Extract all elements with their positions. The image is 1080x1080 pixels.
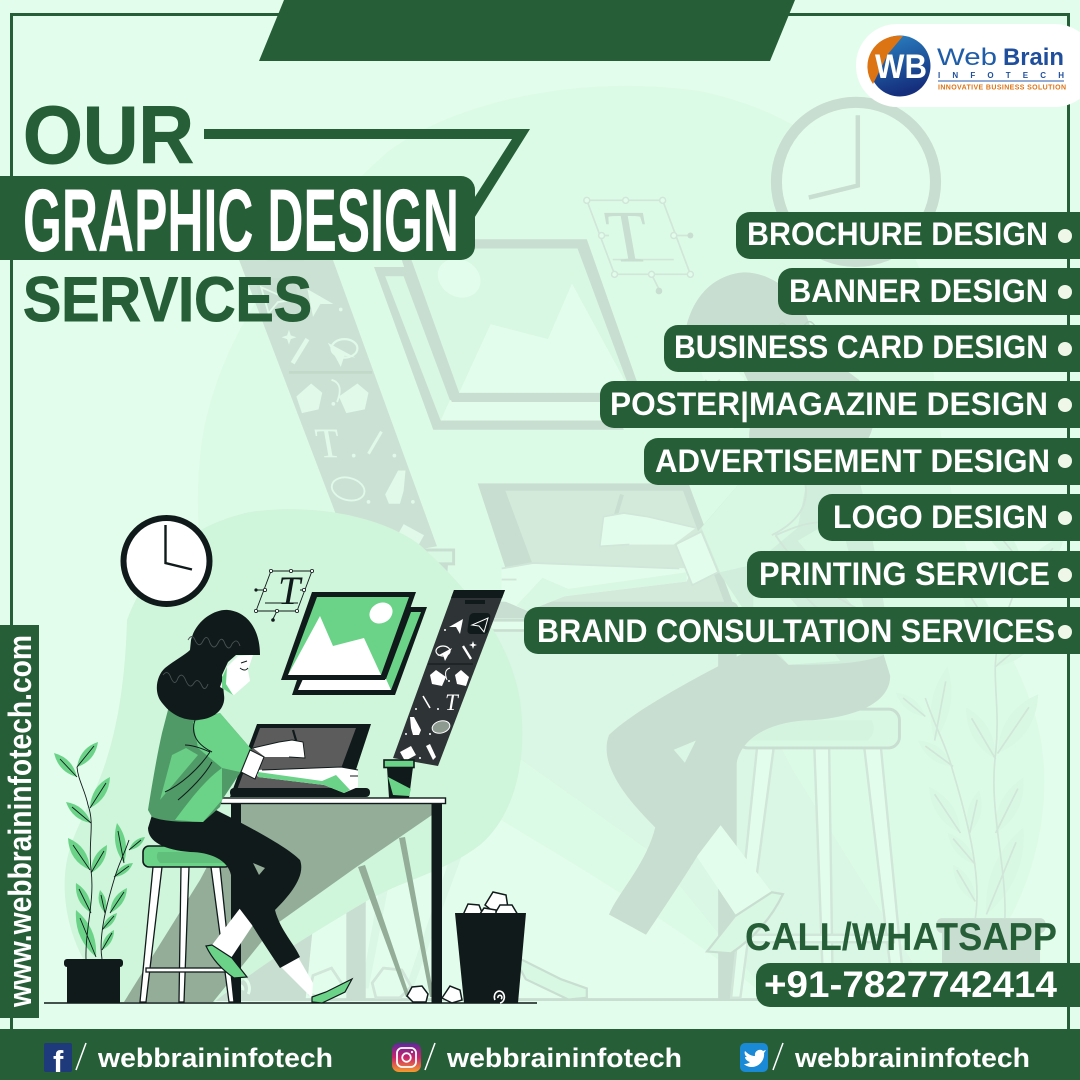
title: OUR: OUR bbox=[23, 90, 194, 181]
website side panel: www.webbraininfotech.com bbox=[2, 635, 38, 1008]
wall clock bbox=[124, 518, 210, 604]
coffee cup bbox=[384, 760, 414, 798]
text frame icon bbox=[254, 568, 314, 622]
shirt bbox=[148, 706, 252, 822]
service: printing service: PRINTING SERVICE bbox=[759, 556, 1050, 592]
hair bbox=[157, 610, 260, 720]
eraser and pencil icons bbox=[400, 744, 436, 761]
title bar: GRAPHIC DESIGN: GRAPHIC DESIGN bbox=[23, 170, 459, 270]
service: brand consultation services: BRAND CONSULTATION SERVICES bbox=[537, 613, 1055, 649]
desk shadow bbox=[124, 803, 434, 1002]
front foot bbox=[281, 957, 352, 1003]
phone number: +91-7827742414 bbox=[764, 964, 1057, 1005]
social: twitter: webbraininfotech bbox=[794, 1043, 1030, 1073]
service: business card design: BUSINESS CARD DESIGN bbox=[674, 329, 1048, 365]
line and type icons bbox=[423, 690, 460, 715]
service: logo design: LOGO DESIGN bbox=[833, 499, 1048, 535]
top banner shape bbox=[259, 0, 795, 61]
services list bbox=[524, 212, 1080, 654]
logo: INFOTECH bbox=[938, 71, 1064, 80]
ghost illustration: mirrored enlarged designer watermark bbox=[171, 86, 1080, 1000]
background blob bbox=[65, 509, 522, 1003]
service: banner design: BANNER DESIGN bbox=[789, 273, 1048, 309]
face bbox=[220, 655, 253, 695]
social: instagram: webbraininfotech bbox=[446, 1043, 682, 1073]
logo: WB bbox=[875, 48, 927, 86]
drawing tablet bbox=[230, 724, 371, 797]
title: SERVICES: SERVICES bbox=[23, 265, 312, 335]
service: logo design bbox=[818, 494, 1080, 541]
floor line bbox=[44, 1002, 537, 1004]
arrow tool icons bbox=[449, 618, 488, 634]
waste bin with paper bbox=[407, 892, 526, 1003]
logo: Brain bbox=[1003, 44, 1064, 71]
logo bbox=[856, 24, 1080, 107]
picture frames bbox=[281, 592, 427, 695]
designer figure bbox=[148, 610, 358, 1003]
title connector line bbox=[204, 129, 530, 220]
desk bbox=[220, 798, 446, 1003]
drawing arm with stylus bbox=[253, 730, 305, 758]
service: advertisement design: ADVERTISEMENT DESIGN bbox=[655, 443, 1050, 479]
service: brochure design: BROCHURE DESIGN bbox=[747, 216, 1048, 252]
lasso and wand icons bbox=[436, 641, 477, 661]
social: facebook: f bbox=[53, 1044, 64, 1079]
service: poster magazine design: POSTER|MAGAZINE DESIGN bbox=[610, 386, 1048, 422]
stool bbox=[140, 846, 234, 1002]
tool panel bbox=[393, 590, 505, 766]
social: facebook: webbraininfotech bbox=[97, 1043, 333, 1073]
logo: INNOVATIVE BUSINESS SOLUTION bbox=[938, 84, 1066, 92]
back foot bbox=[206, 907, 255, 978]
pen nib icons bbox=[430, 668, 469, 686]
brush and ellipse icons bbox=[410, 717, 451, 735]
trousers bbox=[148, 808, 301, 968]
title bar: GRAPHIC DESIGN bbox=[0, 170, 475, 270]
back arm bbox=[255, 767, 358, 793]
text frame icon: T bbox=[278, 568, 303, 613]
plant bbox=[54, 742, 145, 1003]
line and type icons: T bbox=[445, 690, 460, 715]
shirt cuff bbox=[241, 750, 264, 779]
social: facebook bbox=[44, 1043, 333, 1079]
logo: Web bbox=[937, 44, 997, 71]
designer illustration bbox=[44, 509, 537, 1003]
call / whatsapp label: CALL/WHATSAPP bbox=[745, 916, 1057, 959]
service: banner design bbox=[778, 268, 1080, 315]
service: printing service bbox=[747, 551, 1080, 598]
footer bar bbox=[0, 1029, 1080, 1080]
